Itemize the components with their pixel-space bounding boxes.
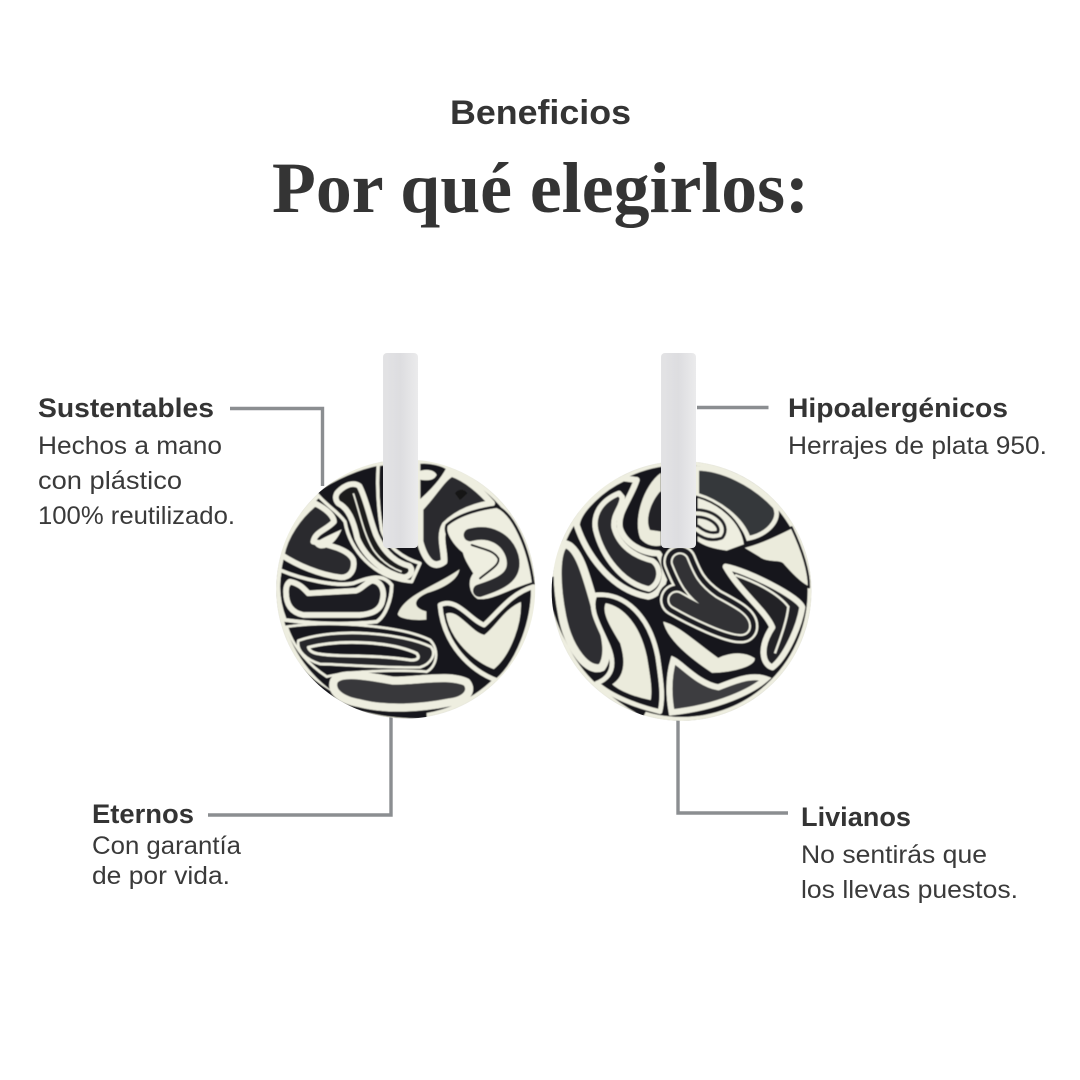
text block: Livianos: Livianos — [801, 802, 911, 832]
text block: Eternos: Con garantía — [92, 832, 241, 860]
text block: Hipoalergénicos: Hipoalergénicos — [788, 393, 1008, 423]
text block: Eternos — [92, 799, 241, 890]
title: Por qué elegirlos: Por qué elegirlos: — [272, 148, 809, 228]
right earring disc — [552, 461, 812, 721]
text block: Livianos: los llevas puestos. — [801, 876, 1018, 904]
text block: Eternos: Eternos — [92, 799, 194, 829]
right earring post — [661, 353, 696, 548]
text block: Sustentables: Hechos a mano — [38, 432, 222, 460]
connector: Eternos — [208, 715, 391, 815]
subtitle: Beneficios: Beneficios — [450, 94, 631, 132]
connector: Livianos — [678, 720, 788, 813]
text block: Sustentables: 100% reutilizado. — [38, 502, 235, 530]
text block: Sustentables: con plástico — [38, 467, 182, 495]
connector: Hipoalergénicos — [697, 406, 768, 409]
text block: Sustentables: Sustentables — [38, 393, 214, 423]
connector: Sustentables — [230, 408, 322, 486]
text block: Hipoalergénicos — [788, 393, 1047, 460]
text block: Livianos: No sentirás que — [801, 841, 987, 869]
text block: Eternos: de por vida. — [92, 862, 230, 890]
left earring disc — [276, 459, 535, 719]
text block: Livianos — [801, 802, 1018, 904]
left earring post — [383, 353, 418, 548]
text block: Hipoalergénicos: Herrajes de plata 950. — [788, 432, 1047, 460]
text block: Sustentables — [38, 393, 235, 530]
